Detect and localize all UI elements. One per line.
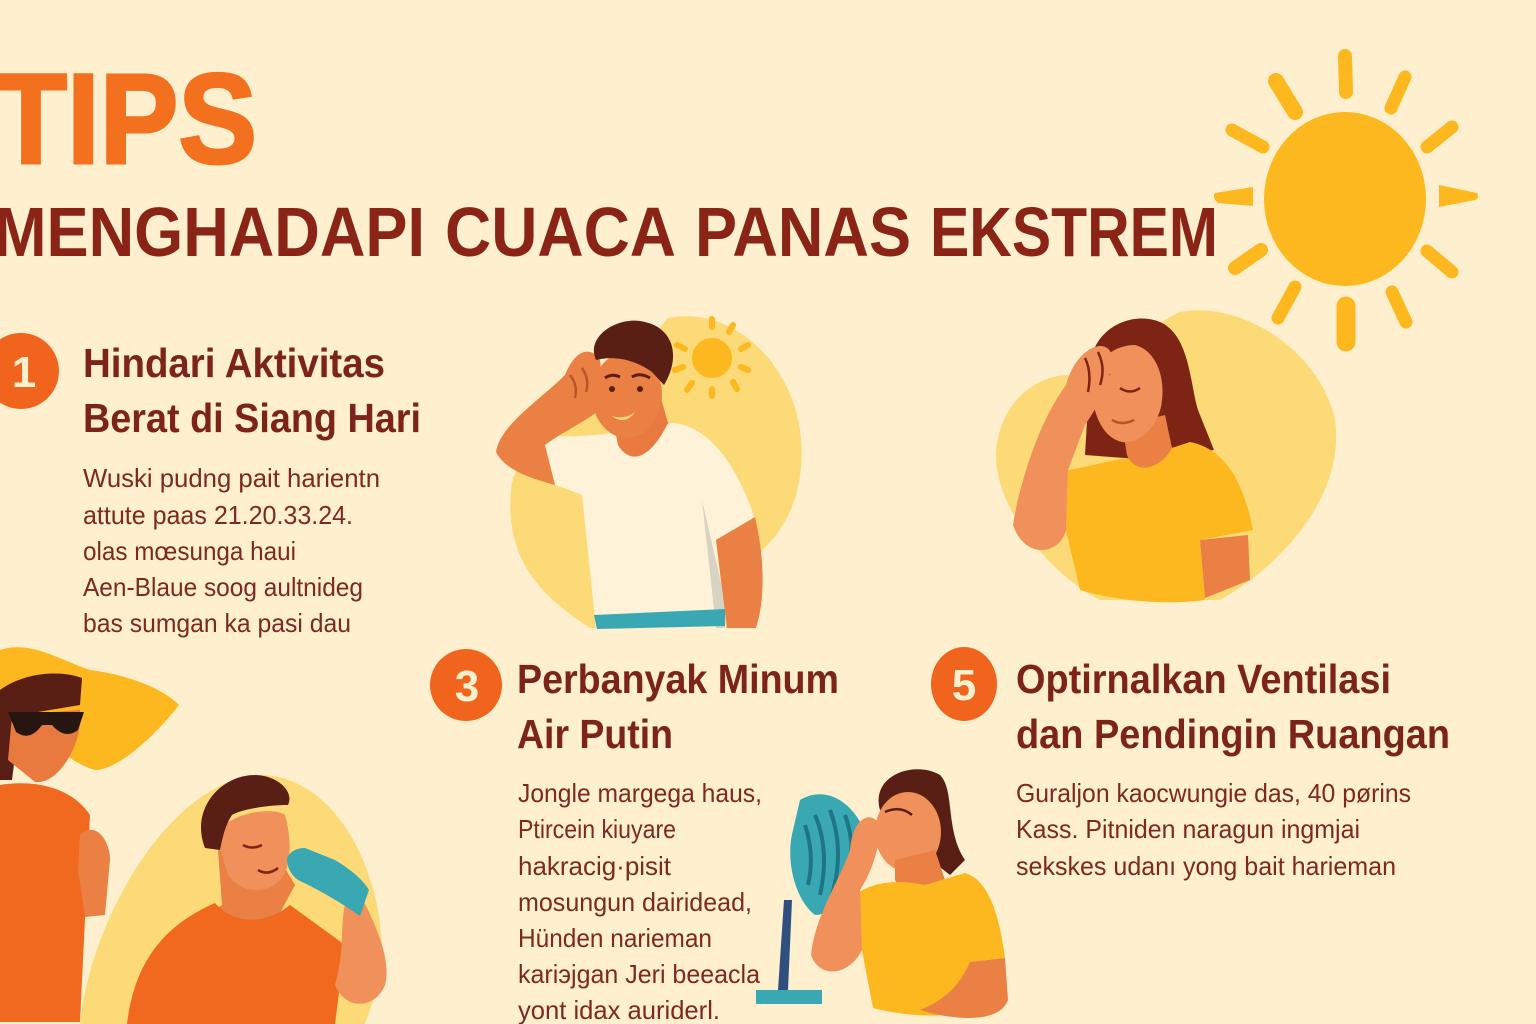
step 1 body text: attute paas 21.20.33.24.: [83, 500, 353, 530]
step 5 body text: Kass. Pitniden naragun ingmjai: [1016, 814, 1360, 844]
step 1 body text: Aen-Blaue soog aultnideg: [83, 572, 363, 602]
step 5 heading: Optirnalkan Ventilasi: [1016, 656, 1391, 702]
step 5 body text: sekskes udanı yong bait harieman: [1016, 851, 1396, 881]
illustration: woman in yellow shirt touching forehead: [996, 310, 1336, 602]
step 3 body text: kariэjgan Jeri beeacla: [518, 959, 761, 989]
step 3 body text: Hünden narieman: [518, 923, 712, 953]
step 3 body text: Ptircein kiuyare: [518, 814, 676, 844]
step 1 heading: Hindari Aktivitas: [83, 340, 385, 386]
step 3 body text: hakracig·pisit: [518, 851, 672, 881]
step 5 heading: dan Pendingin Ruangan: [1016, 711, 1450, 757]
step 3 body text: Jongle margega haus,: [518, 778, 762, 808]
subtitle: MENGHADAPI: [0, 193, 425, 271]
title: TIPS: TIPS: [0, 48, 257, 191]
step 1 badge: 1: [12, 348, 36, 397]
step 1 body text: olas mœsunga haui: [83, 536, 296, 566]
subtitle: PANAS: [695, 193, 911, 271]
step 1 heading: [83, 340, 421, 441]
step 5 badge: [931, 647, 997, 721]
step 3 heading: Perbanyak Minum: [517, 656, 839, 702]
subtitle: CUACA: [445, 193, 676, 271]
illustration: person with hat and sunglasses: [0, 647, 179, 1022]
step 5 body text: [1016, 778, 1411, 881]
step 3 body text: mosungun dairidead,: [518, 887, 752, 917]
step 3 heading: Air Putin: [517, 711, 673, 757]
step 1 badge: [0, 333, 59, 409]
step 5 heading: [1016, 656, 1450, 757]
subtitle: [0, 193, 1218, 271]
step 3 body text: [518, 778, 762, 1024]
illustration: woman with fan: [756, 769, 1008, 1018]
icon: small sun: [675, 319, 748, 396]
illustration: man drinking water: [80, 775, 387, 1024]
step 1 body text: bas sumgan ka pasi dau: [83, 608, 351, 638]
subtitle: EKSTREM: [930, 193, 1218, 271]
icon: large sun: [1214, 56, 1478, 342]
step 1 body text: [83, 463, 380, 638]
step 3 heading: [517, 656, 839, 757]
step 3 badge: 3: [455, 662, 479, 711]
step 1 heading: Berat di Siang Hari: [83, 395, 421, 441]
step 5 badge: 5: [952, 661, 976, 710]
step 1 body text: Wuski pudng pait harientn: [83, 463, 380, 493]
step 5 body text: Guraljon kaocwungie das, 40 pørins: [1016, 778, 1411, 808]
step 3 badge: [430, 649, 502, 721]
illustration: man in white shirt with sun: [496, 316, 802, 629]
